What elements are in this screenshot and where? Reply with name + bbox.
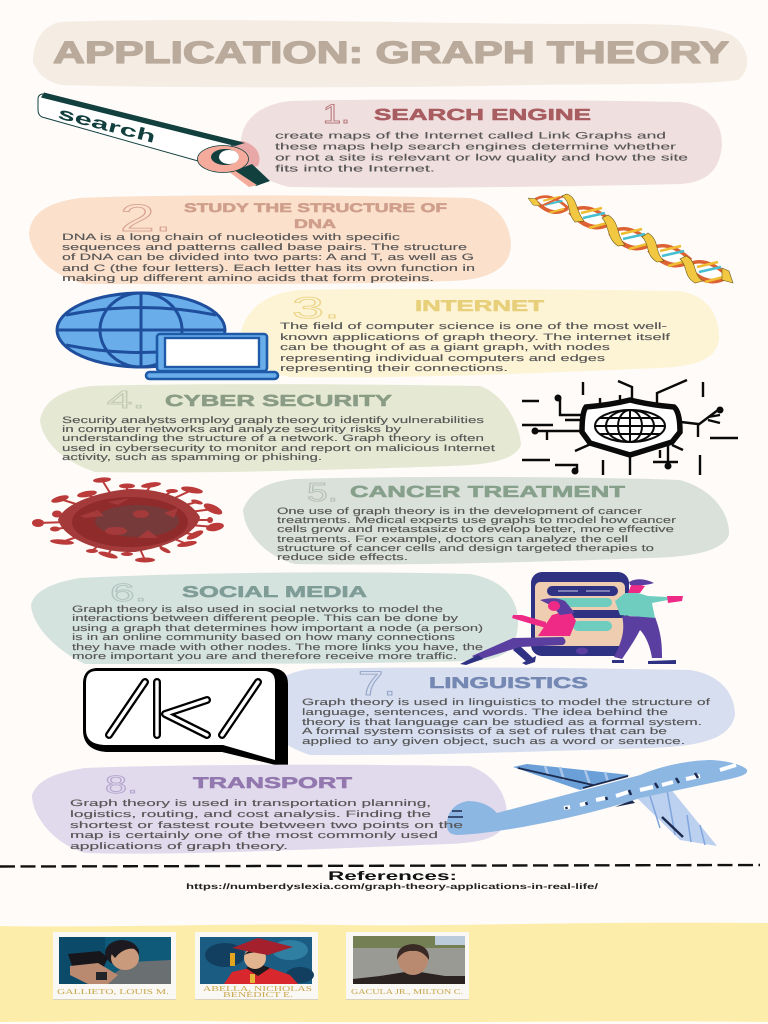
panel: social media: is in an online community based on how many connections xyxy=(72,632,456,642)
panel: search engine: create maps of the Internet called Link Graphs and xyxy=(275,130,666,140)
panel: social media: they have made with other nodes. The more links you have, the xyxy=(72,642,483,652)
panel: linguistics: language, sentences, and words. The idea behind the xyxy=(302,707,668,717)
panel: search engine xyxy=(241,99,722,188)
photo card: Abella: BENEDICT E. xyxy=(223,990,293,999)
panel: cancer treatment: CANCER TREATMENT xyxy=(350,484,625,501)
references: https://numberdyslexia.com/graph-theory-applications-in-real-life/ xyxy=(186,882,599,891)
panel: cancer treatment xyxy=(243,477,729,565)
panel: linguistics xyxy=(261,665,735,755)
text block: transport description: map is certainly one of the most commonly used xyxy=(70,830,438,840)
references xyxy=(186,869,599,891)
panel: social media: more important you are and therefore receive more traffic. xyxy=(72,651,457,661)
panel: linguistics: A formal system consists of a set of rules that can be xyxy=(302,726,667,736)
panel: linguistics: 7. xyxy=(358,665,396,703)
text block: transport description: shortest or fastest route between two points on the xyxy=(70,820,463,830)
icon: people with smartphone xyxy=(460,572,683,665)
panel: cyber security: 4. xyxy=(107,386,145,414)
text block: transport description: Graph theory is used in transportation planning, xyxy=(70,798,431,808)
panel: cyber security: Security analysts employ graph theory to identify vulnerabilities xyxy=(62,415,485,425)
icon: globe shield circuit xyxy=(522,380,738,475)
panel: social media: Graph theory is also used in social networks to model the xyxy=(72,604,443,614)
panel: internet: 3. xyxy=(292,292,340,325)
panel: study the structure of DNA xyxy=(29,195,511,284)
panel: cancer treatment: treatments. For example, doctors can analyze the cell xyxy=(277,534,628,544)
icon: speech bubble with /k/ xyxy=(83,668,288,768)
panel: study the structure of DNA: sequences and patterns called base pairs. The structure xyxy=(62,242,467,252)
photo card: Abella: ABELLA, NICHOLAS xyxy=(203,984,312,993)
panel: internet: INTERNET xyxy=(415,298,545,315)
panel: cancer treatment: 5. xyxy=(307,477,338,507)
panel: transport: 8. xyxy=(105,771,138,799)
photo card: Gacula: GACULA JR., MILTON C. xyxy=(351,987,463,996)
panel: linguistics: theory is that language can be studied as a formal system. xyxy=(302,717,702,727)
photo card: Gallieto: GALLIETO, LOUIS M. xyxy=(57,987,169,996)
panel: cyber security: activity, such as spamming or phishing. xyxy=(62,452,322,462)
panel: internet xyxy=(240,289,719,377)
panel: cyber security: used in cybersecurity to monitor and report on malicious Internet xyxy=(62,443,496,453)
panel: cyber security: understanding the structure of a network. Graph theory is often xyxy=(62,433,484,443)
icon: globe and laptop xyxy=(57,293,278,379)
panel: social media xyxy=(31,572,518,664)
panel: internet: representing their connections. xyxy=(280,363,508,373)
panel: social media: interactions between different people. This can be done by xyxy=(72,613,459,623)
panel: study the structure of DNA: making up different amino acids that form proteins. xyxy=(62,273,434,283)
photo card: Abella xyxy=(195,932,318,1000)
panel: internet: known applications of graph theory. The internet itself xyxy=(280,332,671,342)
panel: search engine: SEARCH ENGINE xyxy=(374,107,592,124)
panel: search engine: these maps help search engines determine whether xyxy=(275,142,676,152)
icon: cancer cell xyxy=(32,477,225,562)
panel: cancer treatment: cells grow and metastasize to develop better, more effective xyxy=(277,524,674,534)
panel: search engine: or not a site is relevant or low quality and how the site xyxy=(275,152,688,162)
panel: cyber security: CYBER SECURITY xyxy=(165,393,393,410)
panel: study the structure of DNA: DNA is a long chain of nucleotides with specific xyxy=(62,232,401,242)
panel: linguistics: applied to any given object, such as a word or sentence. xyxy=(302,736,685,746)
panel: cyber security xyxy=(40,384,521,473)
icon: DNA double helix xyxy=(528,194,733,283)
panel: study the structure of DNA: and C (the four letters). Each letter has its own function in xyxy=(62,263,475,273)
panel: study the structure of DNA: DNA xyxy=(294,217,336,231)
footer band xyxy=(0,923,768,1022)
icon: airplane xyxy=(447,760,747,846)
panel: cancer treatment: structure of cancer cells and design targeted therapies to xyxy=(277,543,654,553)
panel: social media: using a graph that determines how important a node (a person) xyxy=(72,623,483,633)
icon: search bar with magnifier: search xyxy=(56,103,158,147)
text block: transport description: logistics, routing, and cost analysis. Finding the xyxy=(70,809,431,819)
photo card: Gacula xyxy=(346,932,469,1000)
panel: transport: TRANSPORT xyxy=(193,775,353,792)
panel: social media: 6. xyxy=(110,579,147,607)
photo card: Gallieto xyxy=(53,932,176,1000)
references: References: xyxy=(328,869,457,883)
panel: internet: The field of computer science is one of the most well- xyxy=(280,321,667,331)
panel: linguistics: Graph theory is used in linguistics to model the structure of xyxy=(302,697,711,707)
panel: linguistics: LINGUISTICS xyxy=(429,675,588,692)
panel: study the structure of DNA: STUDY THE STRUCTURE OF xyxy=(184,201,448,215)
panel: cancer treatment: One use of graph theory is in the development of cancer xyxy=(277,506,642,516)
title banner xyxy=(33,20,747,87)
panel: transport xyxy=(32,765,507,854)
panel: social media: SOCIAL MEDIA xyxy=(182,584,367,601)
panel: search engine: 1. xyxy=(323,99,350,129)
panel: internet: can be thought of as a giant graph, with nodes xyxy=(280,342,611,352)
icon: search bar with magnifier xyxy=(38,92,270,187)
text block: transport description xyxy=(70,798,463,851)
title banner: APPLICATION: GRAPH THEORY xyxy=(53,35,729,70)
panel: cancer treatment: treatments. Medical experts use graphs to model how cancer xyxy=(277,515,676,525)
panel: search engine: fits into the Internet. xyxy=(275,164,435,174)
panel: cancer treatment: reduce side effects. xyxy=(277,552,408,562)
text block: transport description: applications of graph theory. xyxy=(70,841,288,851)
panel: study the structure of DNA: of DNA can be divided into two parts: A and T, as well as G xyxy=(62,252,474,262)
panel: internet: representing individual computers and edges xyxy=(280,353,606,363)
panel: study the structure of DNA: 2. xyxy=(120,198,172,240)
panel: cyber security: in computer networks and analyze security risks by xyxy=(62,424,402,434)
